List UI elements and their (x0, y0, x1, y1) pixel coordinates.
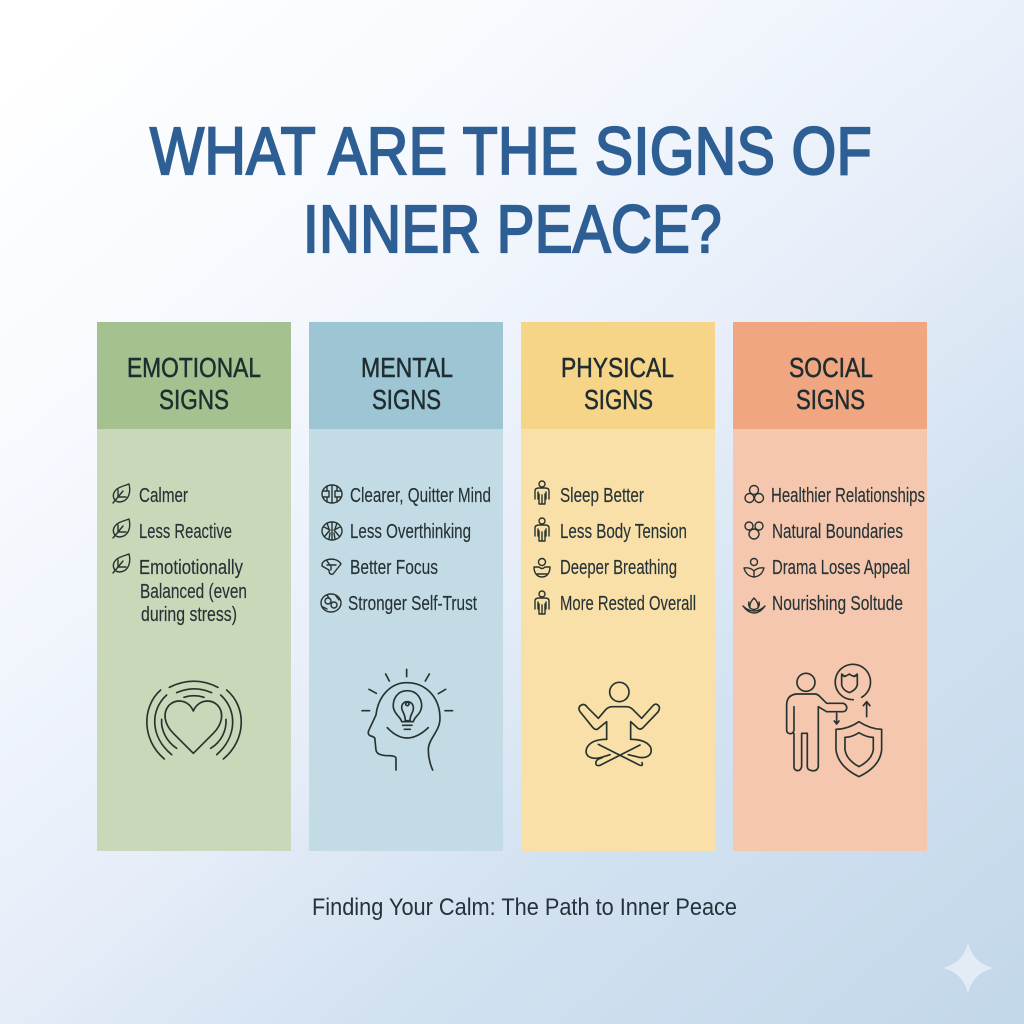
physical header: SIGNS (584, 384, 653, 415)
item: nourishing solitude (743, 593, 903, 615)
emotional header: EMOTIONAL (127, 352, 261, 383)
social header: SIGNS (796, 384, 865, 415)
item: emotionally balanced: Emotiotionally (139, 557, 243, 579)
item: natural boundaries (745, 521, 903, 543)
item: sleep better: Sleep Better (560, 485, 644, 507)
item: sleep better (535, 481, 644, 507)
item: less reactive (113, 519, 232, 543)
panel: emotional signs (97, 322, 291, 851)
item: healthier relationships (745, 485, 925, 507)
item: less body tension (535, 518, 687, 543)
item: stronger self-trust (321, 593, 477, 615)
item: less reactive: Less Reactive (139, 521, 232, 543)
item: less overthinking: Less Overthinking (350, 521, 471, 543)
item: healthier relationships: Healthier Relationships (771, 485, 925, 507)
mental header: SIGNS (372, 384, 441, 415)
item: emotionally balanced: during stress) (141, 604, 237, 626)
item: more rested overall (535, 591, 696, 615)
panel: mental signs (309, 322, 503, 851)
item: nourishing solitude: Nourishing Soltude (772, 593, 903, 615)
physical header: PHYSICAL (561, 352, 674, 383)
social header (733, 322, 927, 429)
item: calmer: Calmer (139, 485, 188, 507)
item: drama loses appeal: Drama Loses Appeal (772, 557, 910, 579)
item: less body tension: Less Body Tension (560, 521, 687, 543)
item: emotionally balanced (113, 554, 247, 626)
icon: heart with arcs (147, 681, 241, 759)
icon: head with light bulb (362, 669, 453, 770)
social header: SOCIAL (789, 352, 873, 383)
item: drama loses appeal (744, 557, 910, 579)
item: clearer mind: Clearer, Quitter Mind (350, 485, 491, 507)
title: INNER PEACE? (303, 192, 722, 267)
icon: sparkle (943, 943, 993, 993)
icon: meditating person (579, 682, 659, 766)
mental header (309, 322, 503, 429)
mental header: MENTAL (361, 352, 453, 383)
item: less overthinking (322, 521, 471, 543)
item: calmer (113, 484, 188, 507)
panel: physical signs (521, 322, 715, 851)
physical header (521, 322, 715, 429)
item: deeper breathing (534, 557, 677, 579)
emotional header: SIGNS (159, 384, 229, 415)
item: more rested overall: More Rested Overall (560, 593, 696, 615)
item: better focus: Better Focus (350, 557, 438, 579)
item: better focus (322, 557, 438, 579)
item: emotionally balanced: Balanced (even (140, 581, 247, 603)
emotional header (97, 322, 291, 429)
footer caption: Finding Your Calm: The Path to Inner Peace (312, 894, 737, 921)
item: natural boundaries: Natural Boundaries (772, 521, 903, 543)
title: WHAT ARE THE SIGNS OF (150, 114, 872, 189)
title (150, 114, 872, 267)
panel: social signs (733, 322, 927, 851)
icon: person with shield (787, 664, 882, 777)
item: deeper breathing: Deeper Breathing (560, 557, 677, 579)
item: stronger self-trust: Stronger Self-Trust (348, 593, 477, 615)
item: clearer mind (322, 485, 491, 507)
